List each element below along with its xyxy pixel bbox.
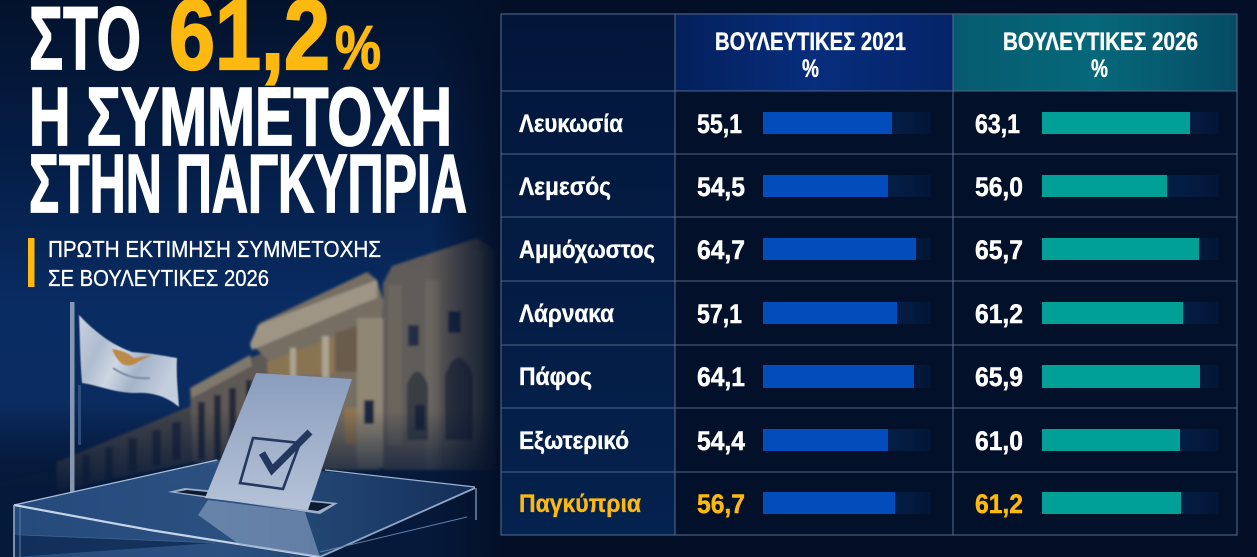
header: 2026	[953, 14, 1237, 91]
row: Λευκωσία: 63,1	[975, 109, 1020, 139]
ballot paper with check mark	[205, 373, 352, 510]
illustration: blurred building	[0, 238, 495, 510]
row: Εξωτερικό	[519, 426, 1219, 456]
title: Η ΣΥΜΜΕΤΟΧΗ	[29, 70, 452, 163]
fade overlays	[0, 410, 500, 500]
row: Λευκωσία: 55,1	[697, 109, 742, 139]
row: Πάφος: 65,9	[975, 362, 1023, 392]
header: 2021	[675, 14, 953, 91]
row: Λάρνακα: 61,2	[975, 299, 1023, 329]
ballot slot	[168, 488, 338, 514]
panel: data table	[501, 14, 1237, 535]
ballot reflection	[198, 500, 320, 557]
icon: flag pole	[70, 302, 81, 492]
row: Λάρνακα: 57,1	[697, 299, 742, 329]
ballot box back and lid	[14, 460, 476, 557]
subtitle with accent bar: ΣΕ ΒΟΥΛΕΥΤΙΚΕΣ 2026	[48, 265, 269, 291]
header: 2026: ΒΟΥΛΕΥΤΙΚΕΣ 2026	[1003, 28, 1198, 56]
header: 2021: %	[802, 55, 819, 83]
row: Εξωτερικό: Εξωτερικό	[519, 427, 629, 455]
row: Αμμόχωστος: 65,7	[975, 235, 1023, 265]
row: Αμμόχωστος: Αμμόχωστος	[519, 236, 655, 264]
row: Λεμεσός: 54,5	[697, 172, 745, 202]
row: Λάρνακα: Λάρνακα	[519, 300, 615, 328]
icon: check box	[240, 438, 300, 489]
row: Λευκωσία: Λευκωσία	[519, 110, 624, 138]
icon: check mark	[262, 432, 310, 470]
row: Παγκύπρια (highlight): Παγκύπρια	[519, 490, 642, 518]
mid wing	[190, 350, 270, 470]
row: Εξωτερικό: 61,0	[975, 426, 1023, 456]
header: 2026: %	[1091, 55, 1108, 83]
row: Παγκύπρια (highlight): 61,2	[975, 489, 1023, 519]
subtitle with accent bar	[28, 236, 381, 291]
subtitle with accent bar: ΠΡΩΤΗ ΕΚΤΙΜΗΣΗ ΣΥΜΜΕΤΟΧΗΣ	[48, 236, 381, 262]
icon: Cyprus flag	[79, 315, 179, 407]
row: Λεμεσός: 56,0	[975, 172, 1023, 202]
row: Παγκύπρια (highlight)	[519, 489, 1219, 519]
row: Παγκύπρια (highlight): 56,7	[697, 489, 745, 519]
row: Πάφος: 64,1	[697, 362, 745, 392]
row: Εξωτερικό: 54,4	[697, 426, 745, 456]
row: Αμμόχωστος: 64,7	[697, 235, 745, 265]
title	[29, 0, 467, 230]
row: Αμμόχωστος	[519, 235, 1219, 265]
row: Λευκωσία	[519, 109, 1219, 139]
row: Λάρνακα	[519, 299, 1219, 329]
header: 2021: ΒΟΥΛΕΥΤΙΚΕΣ 2021	[715, 28, 906, 56]
right block	[383, 238, 495, 470]
photo: parliament building at dusk with flag and ballot box	[0, 0, 500, 557]
row: Πάφος	[519, 362, 1219, 392]
low wing	[57, 405, 195, 490]
title: %	[335, 14, 381, 83]
row: Πάφος: Πάφος	[519, 363, 592, 391]
main block and colonnade	[250, 272, 383, 470]
row: Λεμεσός: Λεμεσός	[519, 173, 611, 201]
row: Λεμεσός	[519, 172, 1219, 202]
title: ΣΤΗΝ ΠΑΓΚΥΠΡΙΑ	[29, 137, 467, 230]
